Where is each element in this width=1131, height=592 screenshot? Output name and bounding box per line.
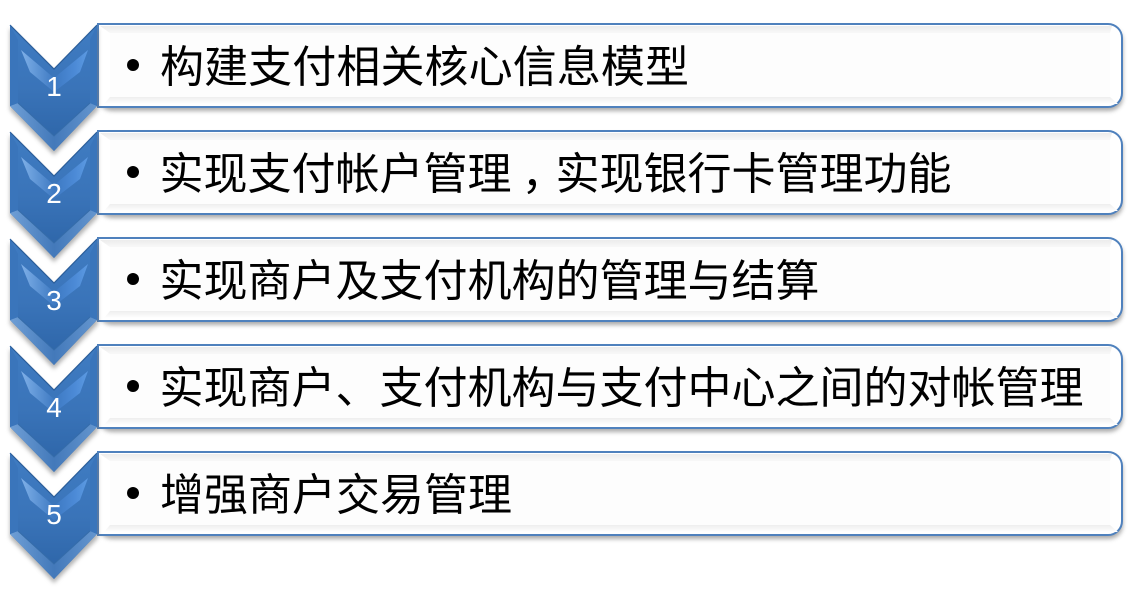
card 3 (98, 238, 1123, 325)
card 5 (98, 452, 1123, 539)
card 1 (98, 24, 1123, 111)
number 4: 4 (46, 392, 62, 423)
chevron 1 (10, 25, 98, 155)
text 3: 实现商户及支付机构的管理与结算 (160, 257, 820, 306)
text 2: 实现支付帐户管理，实现银行卡管理功能 (160, 150, 952, 199)
text 5: 增强商户交易管理 (160, 471, 512, 520)
number 2: 2 (46, 178, 62, 209)
number 3: 3 (46, 285, 62, 316)
step 2 row (10, 131, 1123, 262)
chevron 4 (10, 346, 98, 476)
number 5: 5 (46, 499, 62, 530)
bullet 5 (127, 487, 139, 499)
bullet 2 (127, 166, 139, 178)
chevron 3 (10, 239, 98, 369)
step 5 row (10, 452, 1123, 583)
step 4 row (10, 345, 1123, 476)
number 1: 1 (46, 71, 62, 102)
step 1 row (10, 24, 1123, 155)
text 4: 实现商户、支付机构与支付中心之间的对帐管理 (160, 364, 1084, 413)
step 3 row (10, 238, 1123, 369)
chevron 2 (10, 132, 98, 262)
text 1: 构建支付相关核心信息模型 (160, 43, 689, 92)
chevron 5 (10, 453, 98, 583)
card 2 (98, 131, 1123, 218)
bullet 4 (127, 380, 139, 392)
bullet 3 (127, 273, 139, 285)
bullet 1 (127, 59, 139, 71)
card 4 (98, 345, 1123, 432)
